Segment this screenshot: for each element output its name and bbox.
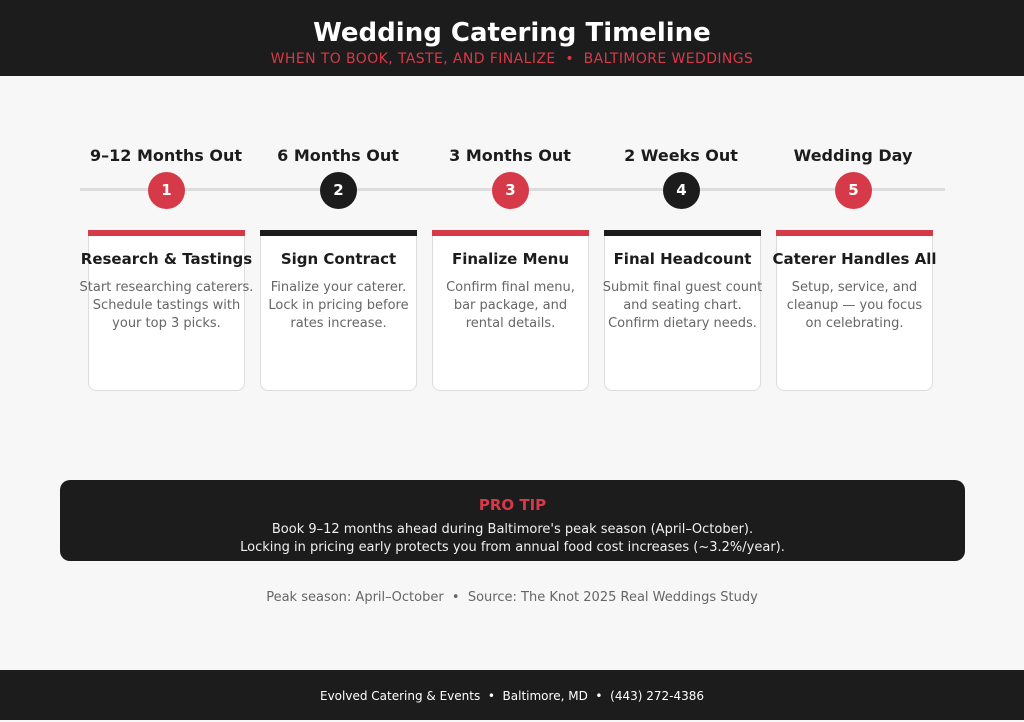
step circle 1 xyxy=(148,172,185,209)
step circle 3 xyxy=(492,172,529,209)
footer: Evolved Catering & Events • Baltimore, MD • (443) 272-4386 xyxy=(320,689,704,703)
card 2: Sign Contract xyxy=(281,250,396,268)
title: Wedding Catering Timeline xyxy=(313,18,711,48)
card 1: your top 3 picks. xyxy=(112,316,221,331)
pro tip callout xyxy=(60,480,965,561)
card 5 xyxy=(776,230,933,391)
pro tip callout: Book 9–12 months ahead during Baltimore's peak season (April–October). xyxy=(272,522,753,537)
step circle 3: 3 xyxy=(505,181,516,199)
card 2: rates increase. xyxy=(290,316,387,331)
card 4: and seating chart. xyxy=(623,298,742,313)
card 3: rental details. xyxy=(466,316,555,331)
card 3: bar package, and xyxy=(454,298,567,313)
card 5: on celebrating. xyxy=(806,316,903,331)
step circle 4: 4 xyxy=(676,181,687,199)
timeline label 4: 2 Weeks Out xyxy=(624,146,738,165)
timeline label 1: 9–12 Months Out xyxy=(90,146,242,165)
card 5: Caterer Handles All xyxy=(772,250,937,268)
card 1 xyxy=(88,230,245,391)
step circle 1: 1 xyxy=(161,181,172,199)
card 4 xyxy=(604,230,761,391)
timeline label 5: Wedding Day xyxy=(794,146,912,165)
timeline label 2: 6 Months Out xyxy=(277,146,399,165)
step circle 5: 5 xyxy=(848,181,859,199)
card 3: Finalize Menu xyxy=(452,250,569,268)
card 2: Finalize your caterer. xyxy=(271,280,406,295)
pro tip callout: PRO TIP xyxy=(479,496,546,514)
step circle 2 xyxy=(320,172,357,209)
source note: Peak season: April–October • Source: The Knot 2025 Real Weddings Study xyxy=(266,590,758,605)
card 5: cleanup — you focus xyxy=(787,298,922,313)
card 4: Submit final guest count xyxy=(603,280,762,295)
header xyxy=(0,0,1024,76)
card 1: Schedule tastings with xyxy=(93,298,240,313)
card 5: Setup, service, and xyxy=(792,280,917,295)
subtitle: WHEN TO BOOK, TASTE, AND FINALIZE • BALTIMORE WEDDINGS xyxy=(271,51,753,67)
pro tip callout: Locking in pricing early protects you from annual food cost increases (~3.2%/year). xyxy=(240,540,785,555)
step circle 2: 2 xyxy=(333,181,344,199)
step circle 4 xyxy=(663,172,700,209)
card 4: Confirm dietary needs. xyxy=(608,316,757,331)
card 1: Research & Tastings xyxy=(81,250,252,268)
footer xyxy=(0,670,1024,720)
card 1: Start researching caterers. xyxy=(80,280,253,295)
card 3 xyxy=(432,230,589,391)
card 3: Confirm final menu, xyxy=(446,280,575,295)
card 2: Lock in pricing before xyxy=(268,298,409,313)
step circle 5 xyxy=(835,172,872,209)
card 4: Final Headcount xyxy=(614,250,751,268)
timeline label 3: 3 Months Out xyxy=(449,146,571,165)
card 2 xyxy=(260,230,417,391)
